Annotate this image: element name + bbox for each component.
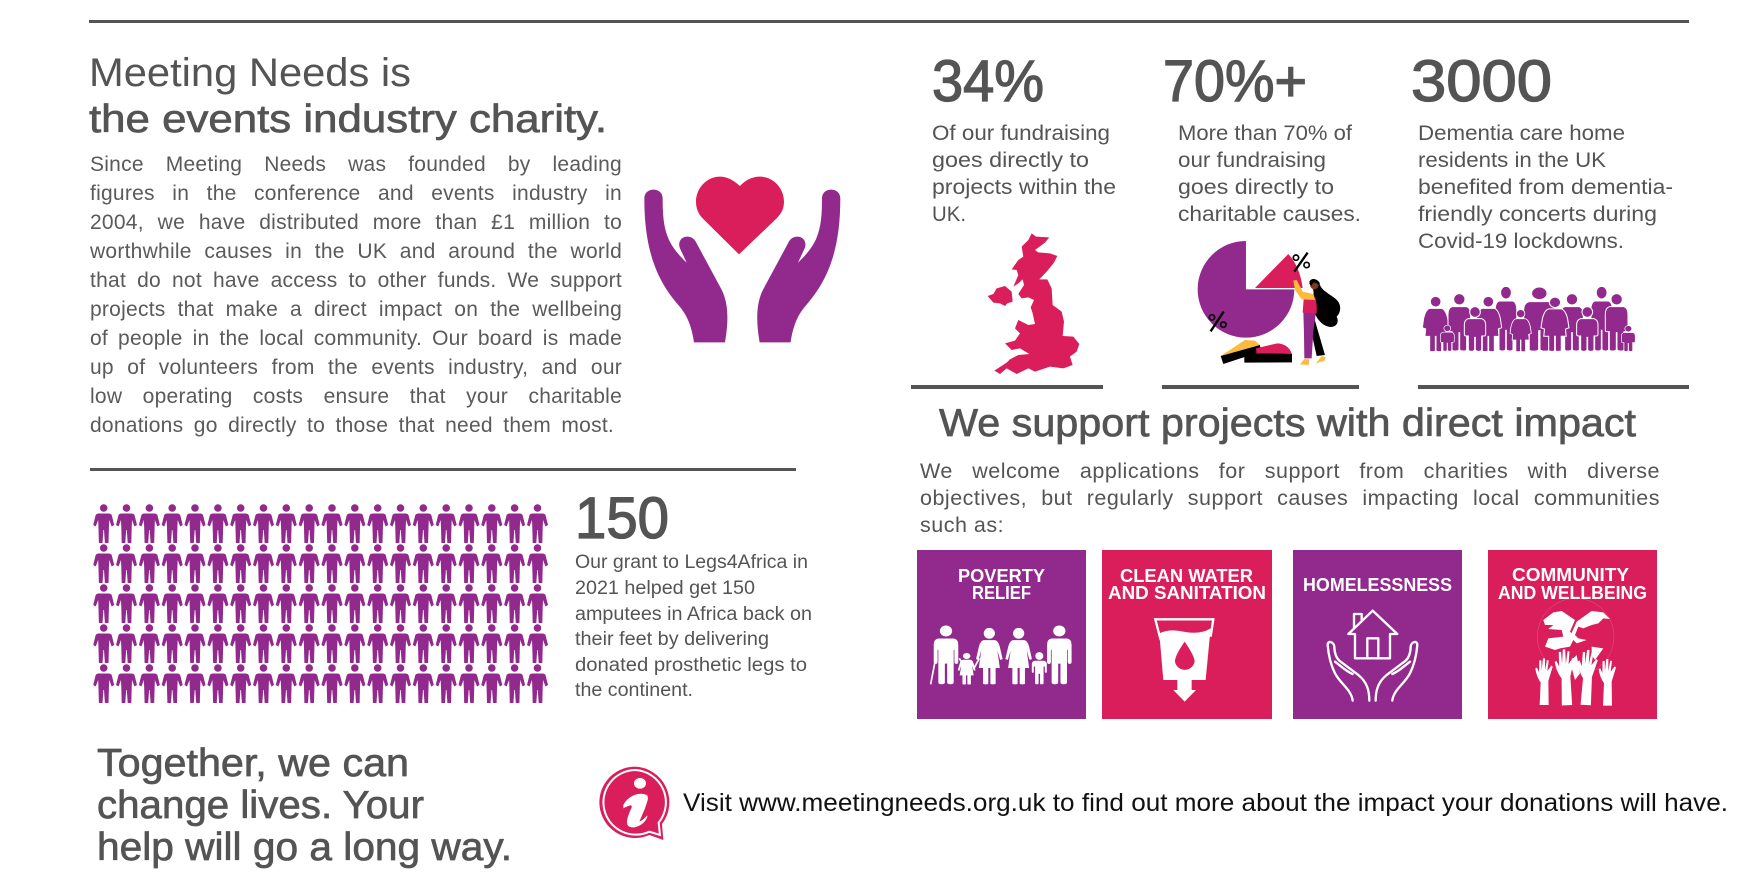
icon: hands holding heart — [644, 177, 840, 342]
text: intro paragraph: of people in the local community. Our board is made — [90, 327, 622, 350]
icon: dementia group of people — [1422, 286, 1635, 352]
stat: 70%+: our fundraising — [1178, 148, 1326, 172]
closing statement: change lives. Your — [97, 784, 424, 827]
card: homelessness — [1293, 550, 1462, 719]
pie — [1198, 241, 1309, 338]
text: applications paragraph — [920, 458, 1660, 537]
icon: house in hands — [1328, 611, 1417, 701]
stat: 150: their feet by delivering — [575, 629, 769, 650]
text: intro paragraph — [90, 153, 622, 437]
card: clean water: CLEAN WATER — [1120, 565, 1253, 586]
stat: 70%+: 70%+ — [1163, 49, 1307, 114]
stat: 34%: projects within the — [932, 175, 1116, 199]
card: homelessness: HOMELESSNESS — [1303, 574, 1452, 595]
stat: 150: 150 — [575, 486, 669, 551]
stat: 150: amputees in Africa back on — [575, 604, 812, 625]
divider — [90, 468, 796, 471]
card: poverty relief: RELIEF — [972, 582, 1031, 603]
stat: 150: the continent. — [575, 680, 693, 701]
text: applications paragraph: objectives, but regularly support causes impacting local communities — [920, 486, 1660, 510]
stat: 34%: 34% — [932, 49, 1044, 114]
stat: 34% — [932, 49, 1116, 226]
top rule — [89, 20, 1689, 23]
stat: 3000: Covid-19 lockdowns. — [1418, 229, 1624, 253]
icon: info speech bubble — [599, 767, 669, 840]
text: intro paragraph: Since Meeting Needs was founded by leading — [90, 153, 622, 176]
stat: 34%: goes directly to — [932, 148, 1089, 172]
icon: globe heart and hands — [1535, 598, 1616, 706]
icon: family — [931, 625, 1072, 684]
text: intro paragraph: 2004, we have distributed more than £1 million to — [90, 211, 622, 234]
text: intro paragraph: that do not have access to other funds. We support — [90, 269, 622, 292]
card: community and wellbeing — [1488, 550, 1657, 719]
heading: Meeting Needs — [89, 51, 607, 141]
stat: 3000: benefited from dementia- — [1418, 175, 1673, 199]
heading: Meeting Needs: the events industry charity. — [89, 98, 607, 141]
stat: 3000: residents in the UK — [1418, 148, 1607, 172]
stat: 34%: UK. — [932, 202, 966, 226]
icon: UK map — [988, 233, 1079, 374]
stat: 70%+ — [1163, 49, 1361, 226]
text: applications paragraph: We welcome applications for support from charities with diverse — [920, 458, 1660, 482]
heading: direct impact: We support projects with direct impact — [939, 402, 1636, 445]
card: community and wellbeing: AND WELLBEING — [1498, 582, 1647, 603]
stat: 34%: Of our fundraising — [932, 121, 1110, 145]
text: intro paragraph: up of volunteers from the events industry, and our — [90, 356, 622, 379]
icon: water glass — [1155, 619, 1213, 702]
stat: 70%+: charitable causes. — [1178, 202, 1361, 226]
card: clean water — [1102, 550, 1272, 719]
text: intro paragraph: figures in the conference and events industry in — [90, 182, 622, 205]
stat: 150: 2021 helped get 150 — [575, 578, 755, 599]
pictogram: 100 people — [93, 504, 548, 703]
stat: 150: donated prosthetic legs to — [575, 655, 807, 676]
card: poverty relief — [917, 550, 1086, 719]
text: applications paragraph: such as: — [920, 513, 1004, 537]
woman and slices — [1221, 279, 1340, 365]
text: intro paragraph: worthwhile causes in the UK and around the world — [90, 240, 622, 263]
text: intro paragraph: projects that make a direct impact on the wellbeing — [90, 298, 622, 321]
stat underlines — [911, 385, 1689, 389]
closing statement: Together, we can — [97, 742, 409, 785]
text: intro paragraph: donations go directly to those that need them most. — [90, 414, 614, 437]
stat: 150 — [575, 486, 812, 701]
card: clean water: AND SANITATION — [1108, 582, 1266, 603]
closing statement: help will go a long way. — [97, 826, 512, 869]
stat: 70%+: More than 70% of — [1178, 121, 1352, 145]
stat: 3000: 3000 — [1411, 49, 1552, 114]
stat: 150: Our grant to Legs4Africa in — [575, 552, 808, 573]
stat: 3000: Dementia care home — [1418, 121, 1625, 145]
text: intro paragraph: low operating costs ensure that your charitable — [90, 385, 622, 408]
website call to action: Visit www.meetingneeds.org.uk to find out more about the impact your donations will have. — [683, 789, 1728, 817]
heading: Meeting Needs: Meeting Needs is — [89, 51, 411, 95]
card: poverty relief: POVERTY — [958, 565, 1046, 586]
card: community and wellbeing: COMMUNITY — [1512, 564, 1630, 585]
stat: 3000: friendly concerts during — [1418, 202, 1657, 226]
closing statement — [97, 742, 512, 869]
stat: 3000 — [1411, 49, 1673, 253]
illustration: pie chart with woman — [1198, 241, 1340, 365]
stat: 70%+: goes directly to — [1178, 175, 1334, 199]
